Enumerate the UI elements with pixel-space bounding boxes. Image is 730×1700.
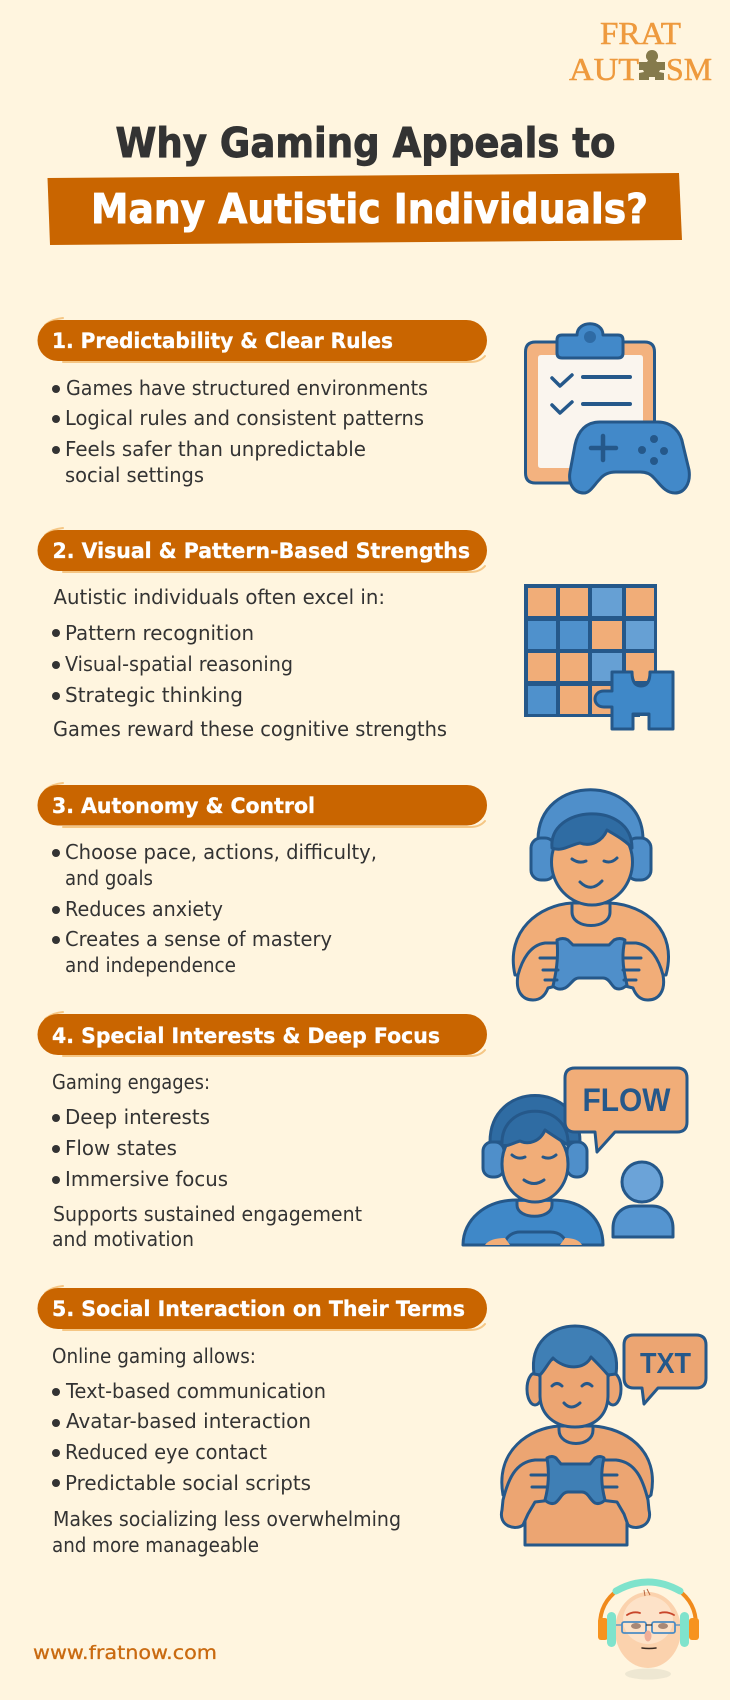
panel: 2 visual and pattern-based strengths xyxy=(38,528,673,741)
logo: Frat Autism xyxy=(569,15,712,87)
speech bubble: FLOW: FLOW xyxy=(582,1082,671,1118)
icon: pattern grid with puzzle piece xyxy=(524,584,673,730)
body text 4: and motivation xyxy=(52,1227,194,1251)
panel: 5 social interaction on their terms xyxy=(38,1286,706,1557)
body text 5: Avatar-based interaction xyxy=(66,1409,311,1433)
heading bar 5: 5. Social Interaction on Their Terms xyxy=(52,1297,465,1321)
title banner xyxy=(48,173,682,245)
title: Why Gaming Appeals to xyxy=(116,119,616,167)
bullet list 1: Games have structured environments xyxy=(66,376,428,400)
bullet list 3 xyxy=(52,840,377,977)
body text 5: Online gaming allows: xyxy=(52,1344,256,1368)
icon: person with headphones holding controller xyxy=(513,790,669,1000)
icon: puzzle piece in logo xyxy=(639,50,665,80)
title xyxy=(48,119,682,245)
icon: clipboard with game controller xyxy=(526,324,689,493)
body text 5: Makes socializing less overwhelming xyxy=(53,1507,401,1531)
icon: person in flow state xyxy=(463,1068,687,1245)
logo: Frat Autism: AUT xyxy=(569,51,639,87)
body text 5 xyxy=(52,1344,401,1557)
title: Many Autistic Individuals? xyxy=(91,185,648,233)
body text 2: Games reward these cognitive strengths xyxy=(53,717,447,741)
avatar: mascot with headphones xyxy=(598,1582,699,1680)
bullet list 3: Reduces anxiety xyxy=(65,897,223,921)
bullet list 3: and goals xyxy=(65,866,153,890)
speech bubble: TXT: TXT xyxy=(640,1348,691,1380)
heading bar 1: 1. Predictability & Clear Rules xyxy=(52,329,393,353)
panel: 3 autonomy and control xyxy=(38,783,669,1000)
body text 2: Autistic individuals often excel in: xyxy=(54,585,385,609)
body text 2 xyxy=(52,585,447,741)
heading bar 5 xyxy=(38,1286,487,1330)
body text 5: Reduced eye contact xyxy=(65,1440,267,1464)
icon: small person xyxy=(613,1162,673,1237)
body text 4 xyxy=(52,1070,362,1251)
bullet list 3: Choose pace, actions, difficulty, xyxy=(65,840,377,864)
icon: person texting while gaming xyxy=(501,1326,706,1545)
bullet list 3: and independence xyxy=(65,953,236,977)
body text 4: Immersive focus xyxy=(65,1167,228,1191)
panel: 1 predictability and clear rules xyxy=(38,318,689,493)
bullet list 1 xyxy=(52,376,428,487)
heading bar 3: 3. Autonomy & Control xyxy=(52,794,315,818)
speech bubble: TXT xyxy=(624,1335,706,1404)
bullet list 1: Logical rules and consistent patterns xyxy=(65,406,424,430)
heading bar 4: 4. Special Interests & Deep Focus xyxy=(52,1024,440,1048)
logo: Frat Autism: SM xyxy=(666,51,712,87)
body text 2: Strategic thinking xyxy=(65,683,243,707)
body text 4: Gaming engages: xyxy=(52,1070,210,1094)
website url: www.fratnow.com xyxy=(33,1642,217,1664)
heading bar 3 xyxy=(38,783,487,827)
heading bar 2 xyxy=(38,528,487,572)
logo: Frat Autism: FRAT xyxy=(600,15,681,51)
body text 4: Flow states xyxy=(65,1136,177,1160)
body text 5: Predictable social scripts xyxy=(65,1471,311,1495)
panel: 4 special interests and deep focus xyxy=(38,1012,687,1251)
body text 5: and more manageable xyxy=(52,1533,259,1557)
body text 5: Text-based communication xyxy=(65,1379,326,1403)
body text 4: Supports sustained engagement xyxy=(53,1202,362,1226)
speech bubble: FLOW xyxy=(565,1068,687,1152)
heading bar 2: 2. Visual & Pattern-Based Strengths xyxy=(52,539,470,563)
heading bar 4 xyxy=(38,1012,487,1056)
bullet list 3: Creates a sense of mastery xyxy=(65,927,332,951)
bullet list 1: social settings xyxy=(65,463,204,487)
body text 2: Visual-spatial reasoning xyxy=(65,652,293,676)
body text 2: Pattern recognition xyxy=(65,621,254,645)
body text 4: Deep interests xyxy=(65,1105,210,1129)
heading bar 1 xyxy=(38,318,487,362)
bullet list 1: Feels safer than unpredictable xyxy=(65,437,366,461)
